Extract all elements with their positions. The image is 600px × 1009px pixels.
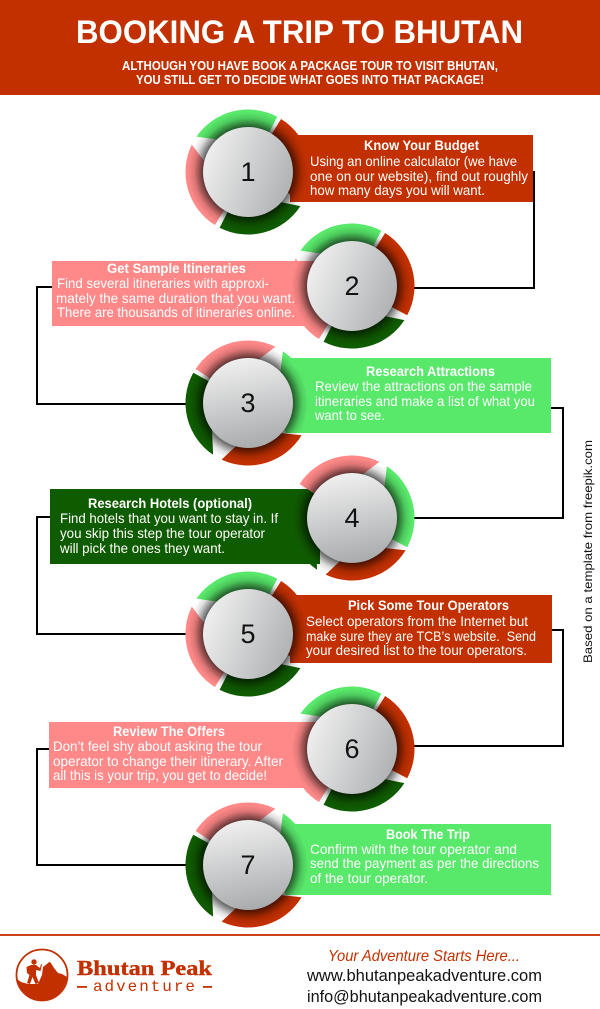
text: review the offers: Don’t feel shy about asking the tour [53, 738, 262, 754]
text: know your budget: how many days you will want. [310, 182, 485, 198]
text: get sample itineraries: There are thousands of itineraries online. [57, 304, 295, 320]
step 5: pick some tour operators [185, 572, 552, 697]
text: pick some tour operators [306, 598, 536, 658]
logo wordmark [77, 956, 212, 996]
ring and numbered disc 5: 5 [240, 619, 256, 649]
ring and numbered disc 4: 4 [344, 503, 360, 533]
text: review the offers: all this is your trip, you get to decide! [53, 767, 267, 783]
text: research attractions: itineraries and make a list of what you [315, 393, 535, 409]
icon: mountain and hiker badge [16, 950, 68, 1000]
text: get sample itineraries: Get Sample Itineraries [107, 261, 246, 276]
ring and numbered disc 3 [185, 340, 310, 465]
side credit: Based on a template from freepik.com [581, 440, 595, 663]
text: book the trip [310, 827, 539, 886]
logo wordmark: Bhutan Peak [77, 956, 212, 980]
text: pick some tour operators: Pick Some Tour Operators [348, 598, 509, 613]
text: research hotels: you skip this step the tour operator [60, 525, 265, 541]
text: review the offers: Review The Offers [113, 724, 225, 739]
connector lines between steps [37, 172, 563, 865]
subtitle [122, 58, 498, 87]
ring and numbered disc 2: 2 [344, 271, 360, 301]
ring and numbered disc 1: 1 [240, 157, 256, 187]
text: know your budget: one on our website), find out roughly [310, 168, 528, 184]
text: review the offers: operator to change their itinerary. After [53, 753, 283, 769]
ring and numbered disc 7: 7 [240, 850, 256, 880]
text: review the offers [53, 724, 283, 783]
text: pick some tour operators: Select operators from the Internet but [306, 613, 528, 629]
text: book the trip: of the tour operator. [310, 870, 428, 886]
text: get sample itineraries [56, 261, 295, 320]
ring and numbered disc 1 [185, 110, 310, 235]
ring and numbered disc 4 [290, 455, 414, 580]
ring and numbered disc 6: 6 [344, 734, 360, 764]
contact block: www.bhutanpeakadventure.com [306, 966, 542, 985]
text: research hotels: Find hotels that you want to stay in. If [60, 510, 278, 526]
header banner [0, 0, 600, 95]
text: know your budget: Know Your Budget [364, 138, 479, 153]
subtitle: YOU STILL GET TO DECIDE WHAT GOES INTO THAT PACKAGE! [136, 72, 484, 87]
logo [16, 950, 212, 1000]
step 6: review the offers [49, 687, 414, 812]
contact block: Your Adventure Starts Here... [328, 948, 520, 965]
logo wordmark: adventure [93, 978, 195, 996]
step 7: book the trip [185, 802, 551, 927]
text: research attractions: want to see. [314, 407, 385, 423]
ring and numbered disc 3: 3 [240, 388, 256, 418]
footer divider [0, 934, 600, 936]
step 1: know your budget [185, 110, 533, 235]
contact block: info@bhutanpeakadventure.com [307, 987, 542, 1006]
text: book the trip: Book The Trip [386, 827, 470, 842]
text: research attractions [314, 364, 535, 423]
text: research hotels: will pick the ones they want. [59, 540, 225, 556]
text: research attractions: Research Attractions [366, 364, 495, 379]
text: book the trip: send the payment as per the directions [310, 855, 539, 871]
text: book the trip: Confirm with the tour operator and [310, 841, 517, 857]
text: get sample itineraries: mately the same duration that you want. [56, 290, 295, 306]
text: know your budget: Using an online calculator (we have [310, 153, 517, 169]
contact block [306, 948, 542, 1006]
ring and numbered disc 2 [289, 224, 414, 349]
title: BOOKING A TRIP TO BHUTAN [76, 14, 523, 50]
step 4: research hotels [50, 455, 414, 580]
ring and numbered disc 5 [185, 572, 310, 697]
text: research hotels [59, 496, 278, 556]
step 3: research attractions [185, 340, 551, 465]
subtitle: ALTHOUGH YOU HAVE BOOK A PACKAGE TOUR TO VISIT BHUTAN, [122, 58, 498, 73]
text: pick some tour operators: make sure they are TCB’s website. Send [306, 628, 536, 644]
text: get sample itineraries: Find several itineraries with approxi- [57, 275, 269, 291]
ring and numbered disc 6 [289, 687, 414, 812]
step 2: get sample itineraries [52, 224, 414, 349]
text: research attractions: Review the attractions on the sample [315, 378, 532, 394]
ring and numbered disc 7 [185, 802, 310, 927]
text: know your budget [310, 138, 528, 198]
text: pick some tour operators: your desired list to the tour operators. [306, 642, 527, 658]
text: research hotels: Research Hotels (optional) [88, 496, 252, 511]
